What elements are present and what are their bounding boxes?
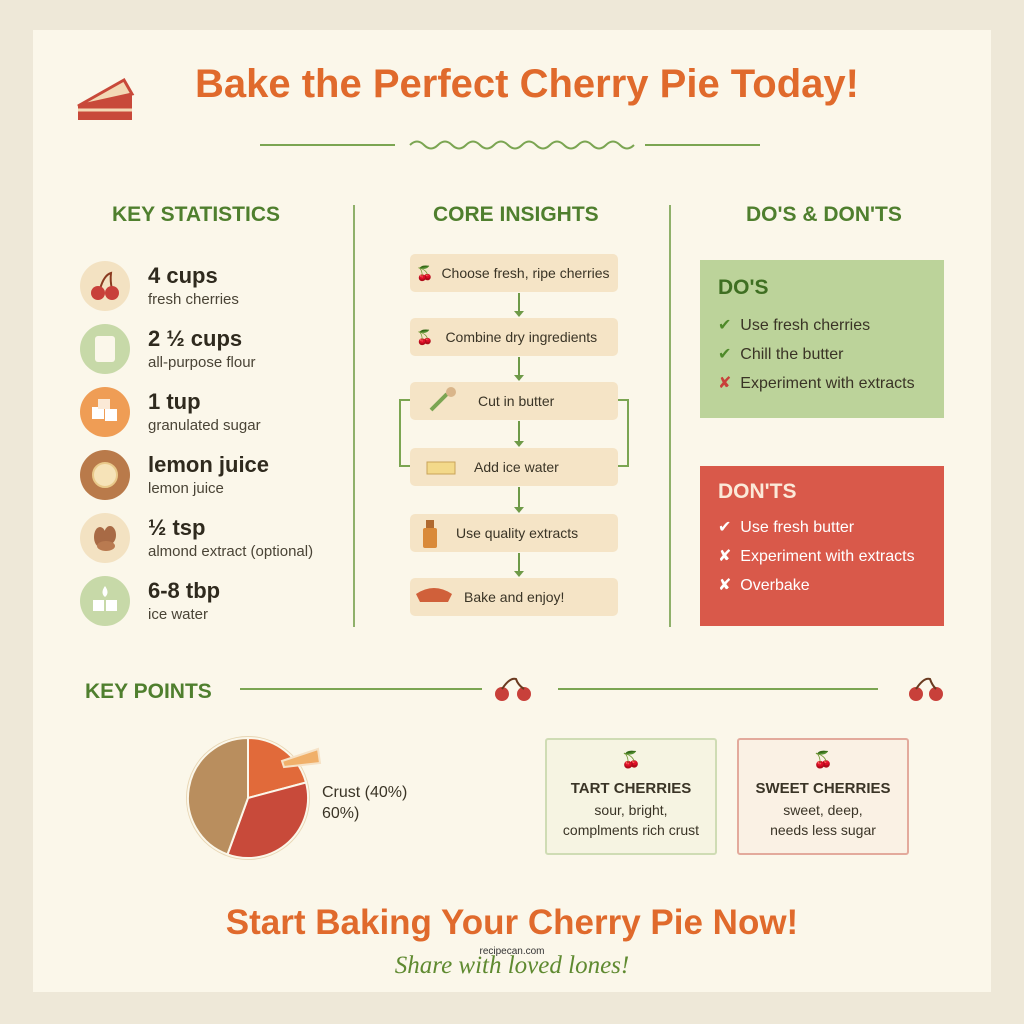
panel: donts: ✘ Overbake [718,577,810,594]
heading: dos & donts: DO'S & DON'TS [746,203,902,226]
card: sweet cherries [737,738,909,855]
card: tart cherries [545,738,717,855]
panel: dos: ✘ Experiment with extracts [718,375,915,392]
stat: almond [80,513,313,563]
heading: key statistics: KEY STATISTICS [112,203,280,226]
divider with wave [260,140,760,150]
stat: cherries: 4 cups [148,263,218,288]
stat: lemon: lemon juice [148,480,224,497]
step 5 [410,514,618,552]
step 5: Use quality extracts [456,525,578,541]
footer cta: Start Baking Your Cherry Pie Now! [226,903,798,942]
card: sweet cherries: needs less sugar [770,822,876,838]
card: sweet cherries: sweet, deep, [783,802,863,818]
stat: flour [80,324,256,374]
step 1 [410,254,618,292]
stat: almond: almond extract (optional) [148,543,313,560]
stat: ice water [80,576,220,626]
card: tart cherries: 🍒 [621,752,641,769]
step 4 [410,448,618,486]
stat: lemon: lemon juice [148,452,269,477]
step 2 [410,318,618,356]
panel: donts: ✔ Use fresh butter [718,519,854,536]
step 6: Bake and enjoy! [464,589,564,605]
pie legend: Crust (40%) [322,784,407,801]
panel: donts [700,466,944,626]
panel: donts: ✘ Experiment with extracts [718,548,915,565]
panel: donts: DON'TS [718,480,796,503]
title: Bake the Perfect Cherry Pie Today! [195,62,859,106]
icon: pie slice [77,78,134,120]
tagline: Share with loved lones! [395,952,629,979]
stat: flour: all-purpose flour [148,354,256,371]
card: tart cherries: TART CHERRIES [571,780,691,797]
stats list [80,261,313,626]
stat: flour: 2 ½ cups [148,326,242,351]
panel: dos [700,260,944,418]
stat: sugar: 1 tup [148,389,201,414]
stat: cherries: fresh cherries [148,291,239,308]
stat: lemon [80,450,269,500]
panel: dos: DO'S [718,276,769,299]
heading: key points: KEY POINTS [85,680,212,703]
stat: cherries [80,261,239,311]
source: recipecan.com [479,946,545,957]
card: tart cherries: complments rich crust [563,822,699,838]
step 1: 🍒 Choose fresh, ripe cherries [416,265,610,281]
pie legend: 60%) [322,805,359,822]
panel: dos: ✔ Chill the butter [718,346,843,363]
stat: ice water: 6-8 tbp [148,578,220,603]
icons in steps [430,387,456,412]
step 4: Add ice water [474,459,559,475]
stat: sugar: granulated sugar [148,417,261,434]
card: tart cherries: sour, bright, [594,802,668,818]
pie chart [186,736,310,860]
stat: almond: ½ tsp [148,515,205,540]
step 2: 🍒 Combine dry ingredients [416,329,597,345]
panel: dos: ✔ Use fresh cherries [718,317,870,334]
flowchart: core insights [410,254,618,616]
stat: sugar [80,387,261,437]
stat: ice water: ice water [148,606,208,623]
pie legend [322,784,407,822]
card: sweet cherries: SWEET CHERRIES [755,780,890,797]
heading: core insights: CORE INSIGHTS [433,203,599,226]
step 3: Cut in butter [478,393,554,409]
step 3 [410,382,618,420]
step 6 [410,578,618,616]
card: sweet cherries: 🍒 [813,752,833,769]
